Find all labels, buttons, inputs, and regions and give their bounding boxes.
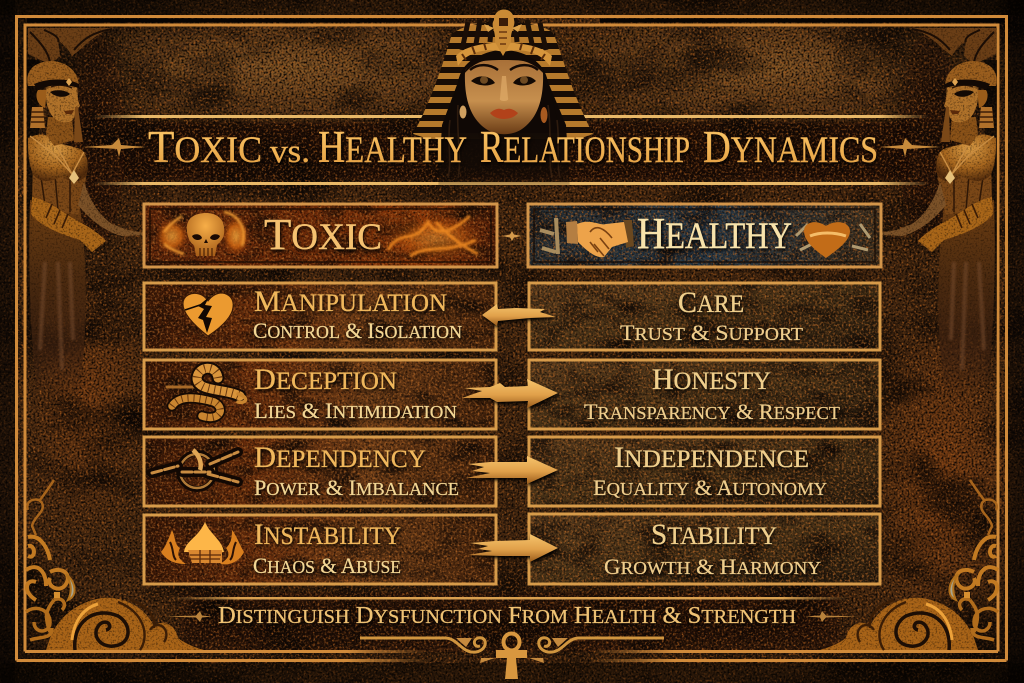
text: deception: DECEPTION (254, 363, 397, 396)
text: deception: LIES & INTIMIDATION (254, 398, 457, 423)
text: stability: STABILITY (651, 518, 777, 551)
title: HEALTHY (318, 122, 467, 172)
icon: skull (187, 213, 224, 256)
text: honesty (584, 363, 840, 424)
text: instability: CHAOS & ABUSE (253, 553, 401, 578)
text: independence: EQUALITY & AUTONOMY (593, 475, 827, 500)
icon: small divider between headers (502, 231, 522, 241)
panel: deception (144, 360, 496, 429)
text: independence: INDEPENDENCE (614, 441, 809, 474)
arrow: dependency to independence (466, 456, 558, 484)
panel: stability (529, 514, 880, 584)
heading: healthy: HEALTHY (637, 209, 792, 258)
icon: footer right flourish (805, 611, 858, 622)
icon: footer left flourish (165, 611, 212, 622)
text: instability (253, 518, 401, 578)
title: TOXIC (148, 122, 262, 172)
text: manipulation: MANIPULATION (254, 285, 447, 318)
footer tagline: DISTINGUISH DYSFUNCTION FROM HEALTH & STRENGTH (218, 603, 796, 629)
icon: golden heart (796, 222, 870, 258)
title rules (93, 115, 930, 185)
panel: dependency (144, 437, 496, 506)
title: DYNAMICS (703, 122, 878, 172)
panel: care (529, 283, 880, 350)
icon: ankh with scrolls (360, 634, 664, 679)
text: instability: INSTABILITY (254, 518, 401, 551)
arrow: instability to stability (468, 534, 558, 562)
arrow: manipulation from care (482, 304, 556, 326)
panel: healthy header (528, 204, 881, 267)
icon: snake (167, 368, 246, 417)
text: independence (593, 441, 827, 500)
text: manipulation (253, 285, 462, 343)
text: honesty: HONESTY (652, 363, 771, 396)
text: stability (604, 518, 821, 579)
figure: queen portrait (413, 10, 593, 190)
arrow: deception to honesty (462, 379, 558, 408)
icon: chains (152, 450, 238, 489)
figure: left Egyptian statue (27, 60, 145, 400)
text: care (620, 286, 803, 345)
title: RELATIONSHIP (480, 122, 690, 172)
text: dependency (254, 441, 459, 500)
title: vs. (270, 134, 310, 170)
panel: independence (529, 437, 880, 506)
text: dependency: DEPENDENCY (254, 441, 426, 474)
icon: burning wreck (161, 522, 244, 564)
text: dependency: POWER & IMBALANCE (254, 475, 459, 500)
text: manipulation: CONTROL & ISOLATION (253, 318, 462, 343)
icon: flames behind skull (155, 212, 250, 256)
text: deception (254, 363, 457, 423)
icon: handshake (540, 218, 634, 257)
panel: instability (144, 515, 496, 584)
text: care: CARE (678, 286, 744, 319)
heading: toxic: TOXIC (264, 210, 382, 259)
figure: right Egyptian statue (879, 60, 997, 400)
icon: title left star (83, 138, 146, 157)
footer rule (170, 597, 850, 600)
panel: manipulation (144, 283, 496, 350)
icon: title right star (880, 138, 941, 157)
panel: honesty (529, 360, 880, 429)
title (148, 122, 878, 172)
panel: toxic header (144, 204, 497, 267)
text: stability: GROWTH & HARMONY (604, 554, 821, 579)
fire texture (383, 214, 487, 262)
text: care: TRUST & SUPPORT (620, 320, 803, 345)
icon: broken heart (183, 293, 233, 336)
text: honesty: TRANSPARENCY & RESPECT (584, 399, 840, 424)
